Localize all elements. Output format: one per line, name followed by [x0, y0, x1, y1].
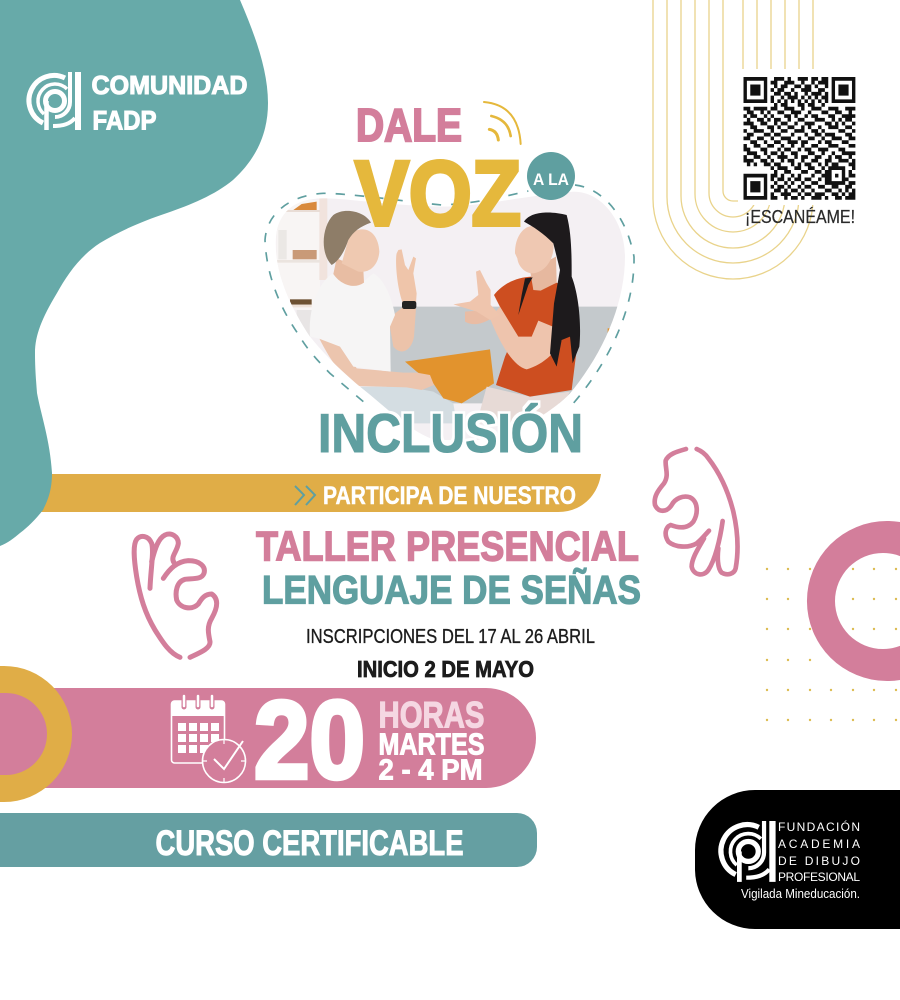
dashed heart outline — [265, 185, 634, 403]
text: fundación academia de dibujo profesional: ACADEMIA — [778, 837, 860, 851]
left woman raised forearm and hand — [389, 307, 416, 351]
decorative gold arch lines — [653, 0, 813, 279]
badge: A LA — [527, 152, 575, 200]
heading: VOZ: VOZ — [355, 143, 521, 245]
text: martes: MARTES — [378, 726, 484, 762]
text: fundación academia de dibujo profesional: DE DIBUJO — [778, 854, 860, 868]
text: fundación academia de dibujo profesional: PROFESIONAL — [778, 870, 860, 884]
gold banner — [30, 474, 601, 512]
text: fundación academia de dibujo profesional: FUNDACIÓN — [778, 819, 860, 834]
left woman neck and face — [333, 258, 364, 286]
heading: INCLUSIÓN: INCLUSIÓN — [318, 402, 583, 464]
right woman front arm — [490, 307, 565, 369]
badge: A LA: A LA — [533, 170, 569, 189]
right woman pants — [477, 387, 570, 423]
text: vigilada mineducación: Vigilada Mineducación. — [741, 886, 860, 901]
heading: comunidad FADP — [92, 70, 248, 136]
pink ring — [807, 521, 900, 681]
QR code — [744, 77, 855, 200]
icon: calendar and clock — [171, 696, 246, 782]
icon: signal waves — [484, 102, 521, 144]
sofa — [387, 307, 621, 403]
banner text: participa de nuestro: PARTICIPA DE NUESTRO — [323, 482, 576, 510]
left woman lower arm — [318, 337, 434, 390]
icon: left hand sign — [134, 534, 217, 657]
black institution panel — [695, 790, 900, 929]
pillow — [405, 349, 494, 403]
right woman forearm behind — [465, 311, 490, 324]
heading: taller presencial: TALLER PRESENCIAL — [256, 522, 639, 570]
right woman shirt — [494, 277, 579, 397]
logo: comunidad FADP — [29, 72, 78, 130]
heading: comunidad FADP: COMUNIDAD — [92, 70, 248, 100]
text: curso certificable: CURSO CERTIFICABLE — [156, 824, 464, 863]
photo: two women signing inside heart — [267, 187, 633, 440]
heading: lenguaje de señas: LENGUAJE DE SEÑAS — [262, 566, 641, 612]
gold ring — [0, 666, 72, 802]
text: fundación academia de dibujo profesional — [778, 819, 860, 884]
text: inicio: INICIO 2 DE MAYO — [357, 656, 534, 682]
icon: right hand sign — [655, 449, 737, 574]
left woman hair — [324, 211, 371, 265]
left woman jeans — [360, 387, 457, 423]
right woman hand — [453, 270, 500, 320]
heading: DALE: DALE — [356, 99, 462, 151]
heading: comunidad FADP: FADP — [92, 106, 156, 136]
left woman shirt — [310, 273, 395, 372]
text: inscripciones: INSCRIPCIONES DEL 17 AL 26 ABRIL — [306, 625, 595, 648]
teal blob background — [0, 0, 268, 546]
logo: fundación — [721, 821, 772, 882]
right woman hair — [524, 213, 580, 367]
QR caption: ¡ESCANÉAME! — [745, 206, 855, 227]
text: horario: 2 - 4 PM — [378, 754, 482, 786]
text: horas: HORAS — [378, 694, 484, 736]
decorative dot grid — [766, 568, 897, 721]
teal certificate bar — [0, 813, 537, 867]
pink hours bar — [0, 688, 536, 788]
right woman neck and face — [530, 257, 557, 291]
number: 20: 20 — [254, 679, 365, 802]
